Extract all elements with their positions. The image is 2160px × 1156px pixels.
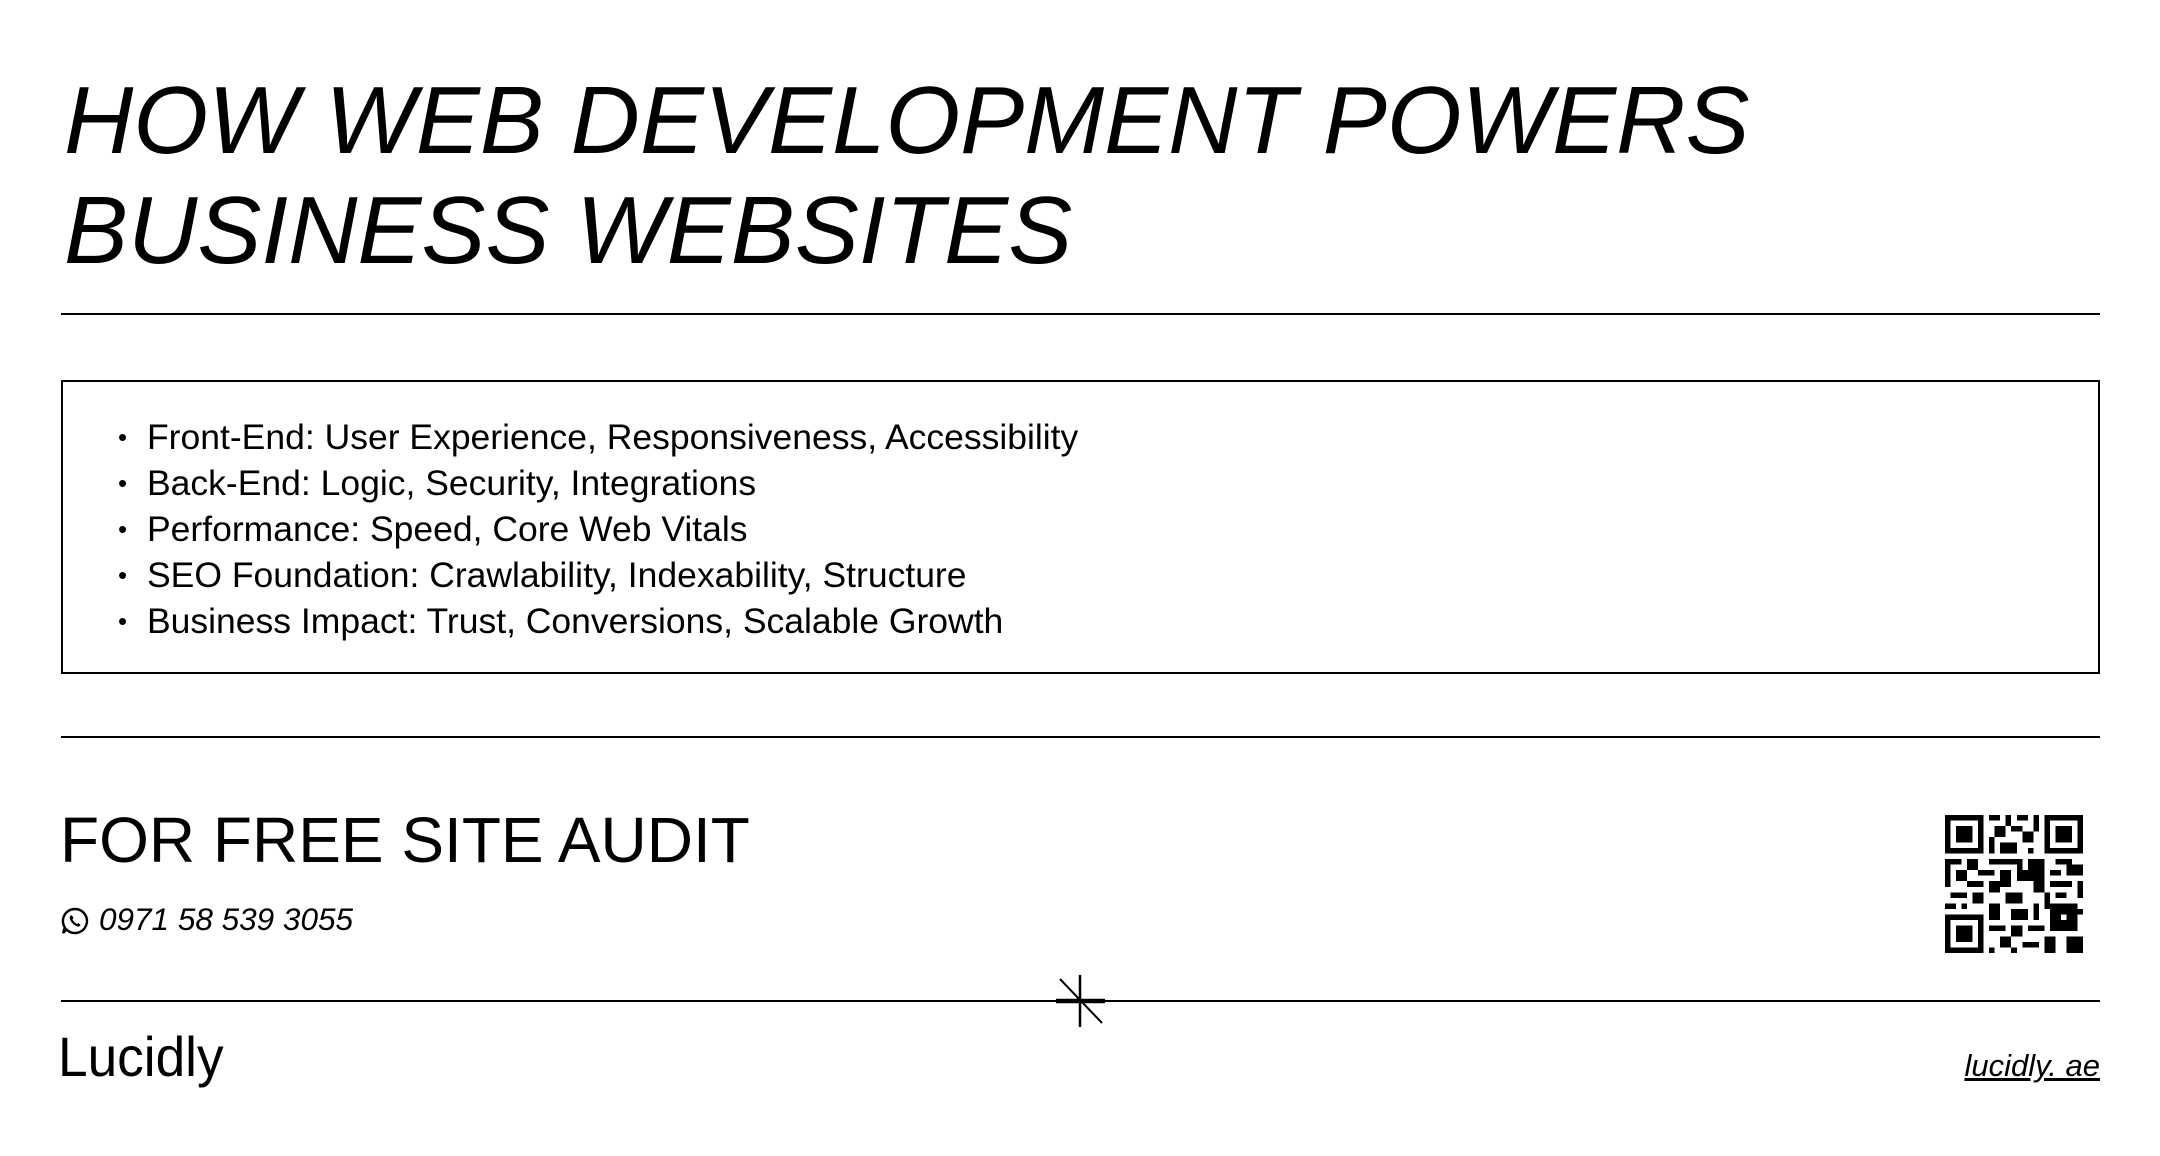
QR code <box>1945 815 2083 953</box>
bullet items: Business Impact: Trust, Conversions, Scalable Growth <box>147 601 1003 641</box>
icon: whatsapp <box>62 908 88 934</box>
website link: lucidly. ae <box>1964 1048 2100 1083</box>
bullet items: Performance: Speed, Core Web Vitals <box>147 509 748 549</box>
icon: sparkle cross on divider <box>1056 975 1105 1027</box>
text: 0971 58 539 3055 <box>99 901 353 937</box>
title: BUSINESS WEBSITES <box>64 177 1072 284</box>
panel: bullet list: • <box>118 422 127 452</box>
bullet items: Back-End: Logic, Security, Integrations <box>147 463 756 503</box>
call to action heading: FOR FREE SITE AUDIT <box>60 804 750 876</box>
panel: bullet list: • <box>118 606 127 636</box>
contact: whatsapp phone <box>62 901 354 937</box>
panel: bullet list: • <box>118 514 127 544</box>
bullet items: Front-End: User Experience, Responsiveness, Accessibility <box>147 417 1078 457</box>
bullet items <box>118 417 1078 641</box>
logo: Lucidly: Lucidly <box>58 1025 224 1088</box>
title <box>64 67 1749 284</box>
title: HOW WEB DEVELOPMENT POWERS <box>64 67 1749 174</box>
panel: bullet list: • <box>118 468 127 498</box>
bullet items: SEO Foundation: Crawlability, Indexability, Structure <box>147 555 966 595</box>
panel: bullet list: • <box>118 560 127 590</box>
panel: bullet list <box>61 380 2100 674</box>
